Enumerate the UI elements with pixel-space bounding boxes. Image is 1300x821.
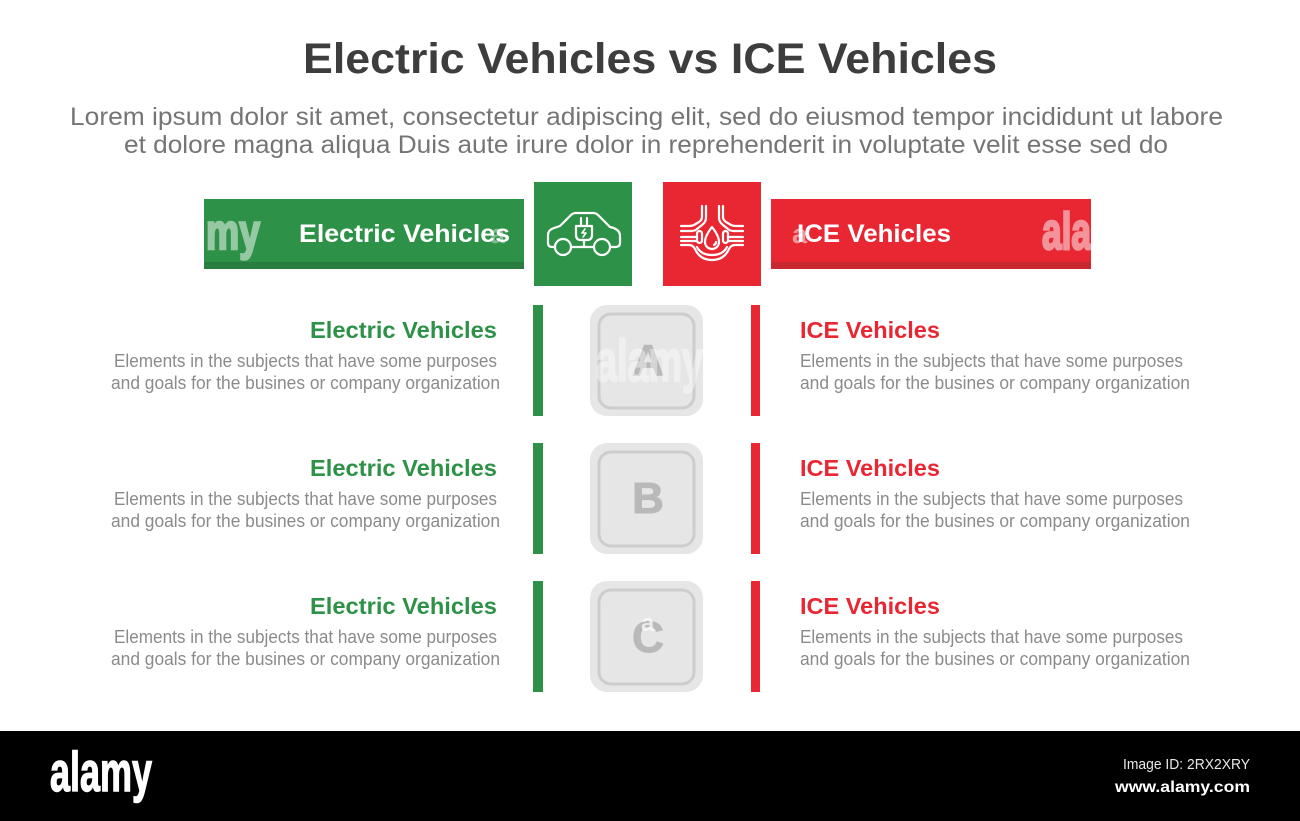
right text C: ICE Vehicles (800, 593, 940, 619)
red divider B (751, 443, 760, 554)
right text C (800, 593, 1190, 669)
right text A: and goals for the busines or company organization (800, 373, 1190, 393)
header banner: Electric Vehicles: a (490, 219, 506, 249)
footer bar (0, 731, 1300, 821)
right text C: Elements in the subjects that have some purposes (800, 627, 1183, 647)
subtitle text: et dolore magna aliqua Duis aute irure dolor in reprehenderit in voluptate velit esse sed do (124, 131, 1168, 159)
letter tile C: C (632, 613, 664, 662)
letter tile B: B (632, 474, 664, 523)
right text A: ICE Vehicles (800, 317, 940, 343)
left text B: Electric Vehicles (310, 455, 497, 481)
subtitle text (70, 103, 1223, 159)
footer logo: alamy (50, 740, 152, 803)
left text A: and goals for the busines or company organization (111, 373, 500, 393)
left text C: and goals for the busines or company organization (111, 649, 500, 669)
left text B: and goals for the busines or company organization (111, 511, 500, 531)
left text A (111, 317, 500, 393)
header banner: ICE Vehicles (771, 199, 1092, 269)
footer image id: Image ID: 2RX2XRY (1123, 756, 1250, 773)
red divider C (751, 581, 760, 692)
left text C (111, 593, 500, 669)
right text B: Elements in the subjects that have some purposes (800, 489, 1183, 509)
green divider B (533, 443, 543, 554)
right text B: and goals for the busines or company organization (800, 511, 1190, 531)
subtitle text: Lorem ipsum dolor sit amet, consectetur adipiscing elit, sed do eiusmod tempor incididunt ut labore (70, 103, 1223, 131)
red divider A (751, 305, 760, 416)
green divider A (533, 305, 543, 416)
letter tile C: a (641, 610, 655, 637)
left text B: Elements in the subjects that have some purposes (114, 489, 497, 509)
row C (111, 581, 1190, 692)
title: Electric Vehicles vs ICE Vehicles (303, 35, 997, 83)
letter tile A (590, 305, 703, 416)
footer url: www.alamy.com (1114, 779, 1250, 796)
icon: engine fuel pipes (663, 182, 761, 286)
letter tile B (590, 443, 703, 554)
right text B: ICE Vehicles (800, 455, 940, 481)
header banner: ICE Vehicles: a (792, 219, 808, 249)
header banner: Electric Vehicles: Electric Vehicles (299, 220, 510, 248)
letter tile A: A (632, 336, 664, 385)
left text B (111, 455, 500, 531)
right text A: Elements in the subjects that have some purposes (800, 351, 1183, 371)
left text C: Elements in the subjects that have some purposes (114, 627, 497, 647)
letter tile A: alamy (596, 329, 703, 394)
right text A (800, 317, 1190, 393)
letter tile C (590, 581, 703, 692)
row A (111, 305, 1190, 416)
left text C: Electric Vehicles (310, 593, 497, 619)
icon: electric car (534, 182, 632, 286)
green divider C (533, 581, 543, 692)
right text C: and goals for the busines or company organization (800, 649, 1190, 669)
header banner: Electric Vehicles (204, 199, 524, 269)
header banner: ICE Vehicles: ala (1042, 203, 1092, 261)
row B (111, 443, 1190, 554)
left text A: Elements in the subjects that have some purposes (114, 351, 497, 371)
left text A: Electric Vehicles (310, 317, 497, 343)
header banner: Electric Vehicles: my (206, 204, 260, 260)
header banner: ICE Vehicles: ICE Vehicles (797, 220, 951, 248)
right text B (800, 455, 1190, 531)
